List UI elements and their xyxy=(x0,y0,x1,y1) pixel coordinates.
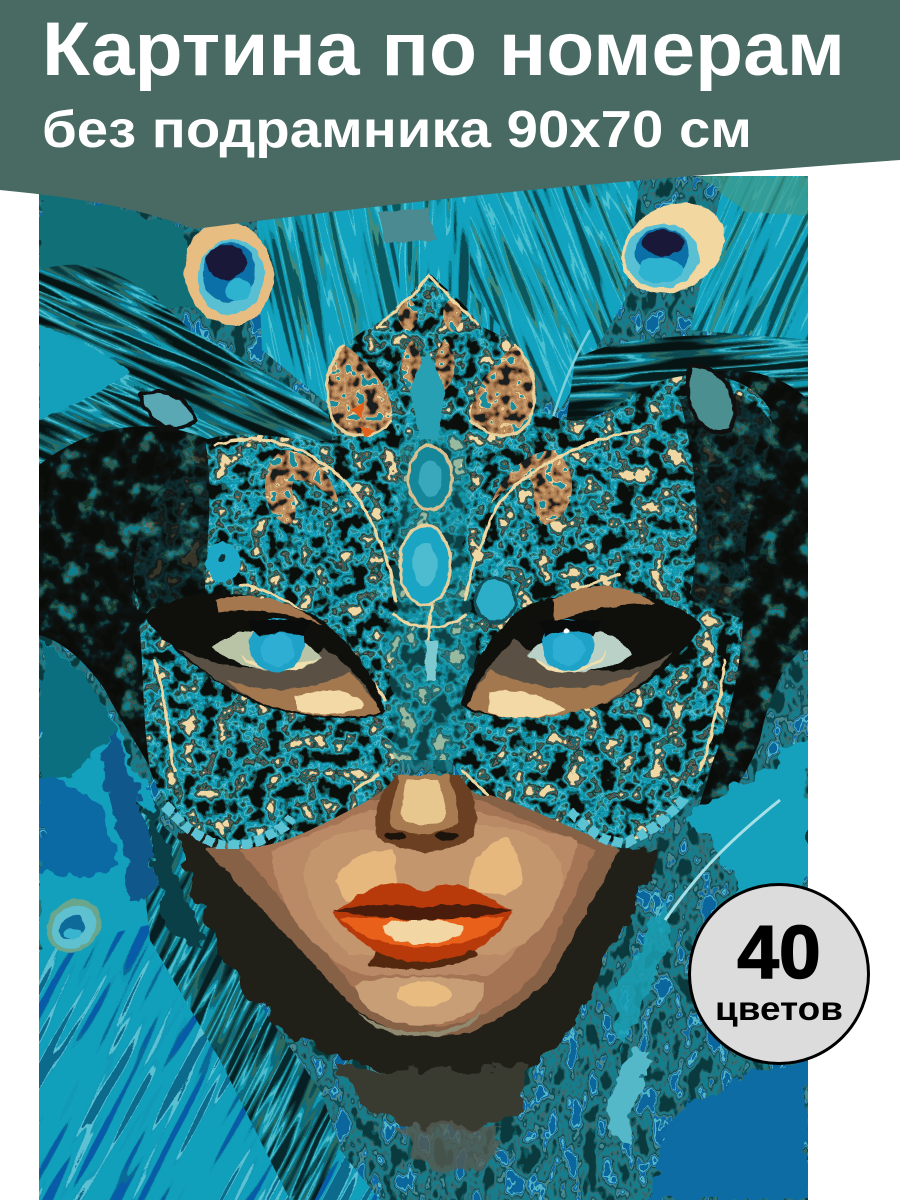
iris xyxy=(250,618,304,672)
jeweled mask xyxy=(125,272,776,848)
peacock eye: lower left xyxy=(46,898,102,953)
lower lace xyxy=(165,797,685,846)
lower feathers: left xyxy=(39,639,380,1200)
painting: peacock mask portrait xyxy=(39,176,808,1200)
eye white xyxy=(212,630,322,671)
badge: 40 colours: 40 xyxy=(737,910,821,994)
neck shadow xyxy=(178,830,660,1175)
gold filigree xyxy=(155,275,725,795)
lips xyxy=(333,883,513,969)
lower feathers: right xyxy=(610,740,808,1200)
dark hair xyxy=(39,370,808,830)
crown paisleys xyxy=(140,298,734,525)
nose xyxy=(375,775,477,852)
banner xyxy=(0,0,900,229)
socket xyxy=(462,592,702,718)
mask speckled body xyxy=(134,272,772,848)
badge: 40 colours xyxy=(690,884,868,1064)
peacock eye: upper right xyxy=(621,202,726,294)
eye white xyxy=(528,629,632,672)
badge: 40 colours: цветов xyxy=(715,990,843,1027)
peacock eye: upper left xyxy=(183,223,274,326)
gem column xyxy=(206,446,515,680)
iris xyxy=(542,619,594,671)
left eye xyxy=(143,594,385,718)
subtitle: без подрамника 90х70 см xyxy=(42,101,752,159)
right eye xyxy=(462,586,702,718)
painted feather background xyxy=(39,176,808,1200)
upper feather strokes xyxy=(39,176,808,465)
title: Картина по номерам xyxy=(42,7,845,92)
mask outer shadow xyxy=(125,391,776,620)
skin xyxy=(206,780,620,1037)
central turquoise wash xyxy=(386,425,474,770)
socket xyxy=(143,594,385,718)
face xyxy=(178,775,660,1175)
